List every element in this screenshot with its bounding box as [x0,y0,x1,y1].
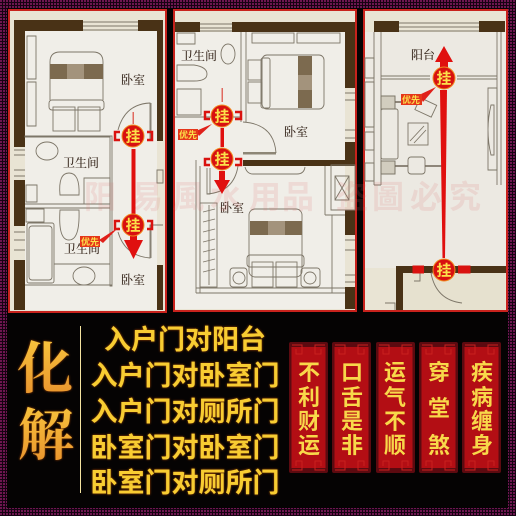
watermark: 阳易風水用品盗圖必究 [84,179,481,215]
title: 化解: 解 [18,406,74,468]
badge: middle bottom: 挂 [214,150,230,168]
entry room [403,273,505,310]
tv stand [245,167,305,174]
callout: right priority: 优先 [402,94,420,105]
room labels: 卫生间 [181,48,217,63]
callout: left priority [80,227,119,247]
banner: 疾病缠身 [462,342,501,473]
room interior [175,32,345,309]
panel: middle floor plan: 卧室 [284,124,308,139]
sofa set [381,96,443,174]
banner: 疾病缠身: 疾 [471,360,493,385]
banner: 口舌是非: 是 [341,409,363,434]
badge: right top [433,67,455,89]
panel: left floor plan [9,10,166,312]
divider line [80,326,81,493]
lower bed [230,209,320,287]
badge: middle bottom [205,148,241,170]
text block: door conflicts [90,324,280,498]
panel: left floor plan: 卫生间 [63,155,99,170]
banner: 运气不顺 [376,342,415,473]
left neighbour fixtures [365,58,374,181]
banner: 不利财运 [289,342,328,473]
badge: left top [115,125,152,147]
callout: middle priority: 优先 [179,129,197,140]
callout: left priority: 优先 [81,236,99,247]
arrow: right panel [435,46,453,258]
text block: door conflicts: 入户门对阳台 [104,324,266,355]
room interior [365,32,506,268]
banner: 穿堂煞: 堂 [428,396,450,421]
badge: right top: 挂 [436,70,452,88]
banner: 口舌是非: 口 [341,360,363,385]
bathroom walls [25,136,112,286]
panel: left floor plan: 卧室 [121,272,145,287]
panel: left floor plan: 卫生间 [64,241,100,256]
banner: 运气不顺: 不 [384,409,406,434]
walls [14,20,163,310]
banner: 运气不顺: 气 [384,385,406,410]
text block: door conflicts: 入户门对卧室门 [90,361,280,391]
banner: 穿堂煞: 穿 [428,360,450,385]
callout: middle priority [178,124,212,140]
badge: middle top [205,105,241,127]
badge: left bottom [115,214,152,236]
panel: right floor plan [364,10,507,311]
callout: right priority [401,87,436,105]
closet [27,36,36,126]
panel: middle floor plan [174,10,356,311]
interior lines [175,32,345,293]
banner: 运气不顺: 运 [384,360,406,385]
bathtub [27,223,54,283]
banner: 运气不顺: 顺 [384,433,406,458]
walls [374,21,506,310]
title: 化解: 化 [17,339,73,401]
banner: 疾病缠身: 缠 [471,409,493,434]
banner: 疾病缠身: 身 [471,433,493,458]
bathroom fixtures [177,33,207,115]
upper bed [248,33,340,109]
banner: 不利财运: 不 [298,360,320,385]
title: 化解 [17,339,74,468]
badge: right bottom [413,259,470,281]
text block: door conflicts: 入户门对厕所门 [90,397,280,427]
banner: 穿堂煞: 煞 [428,433,450,458]
wardrobe [200,203,217,287]
balcony label: 阳台 [411,47,435,62]
banner: 疾病缠身: 病 [471,385,493,410]
badge: left top: 挂 [125,128,141,146]
banner: 不利财运: 运 [298,433,320,458]
banner: 口舌是非 [332,342,371,473]
windows [399,23,479,31]
banner: 口舌是非: 非 [341,433,363,458]
walls [175,22,355,309]
doors [118,103,163,258]
text block: door conflicts: 卧室门对厕所门 [90,468,280,498]
ventilation box [331,165,355,210]
banner: 不利财运: 利 [298,385,320,410]
partitions [374,32,501,185]
bed [49,52,104,131]
badge: middle top: 挂 [214,108,230,126]
badge: right bottom: 挂 [436,262,452,280]
door arcs [207,122,276,194]
banner: 穿堂煞 [419,342,458,473]
sinks [36,142,58,160]
windows [200,24,355,282]
banner: 口舌是非: 舌 [341,385,363,410]
toilets [26,173,110,240]
room labels: 卧室 [121,72,145,87]
panel: middle floor plan: 卧室 [220,200,244,215]
text block: door conflicts: 卧室门对卧室门 [90,433,280,463]
badge: left bottom: 挂 [125,216,141,234]
tv cabinet [488,88,497,170]
arrow: middle panel [214,88,230,194]
windows [14,22,138,250]
banner: 不利财运: 财 [298,409,320,434]
room interior [25,31,157,310]
arrow: left panel [124,112,143,259]
